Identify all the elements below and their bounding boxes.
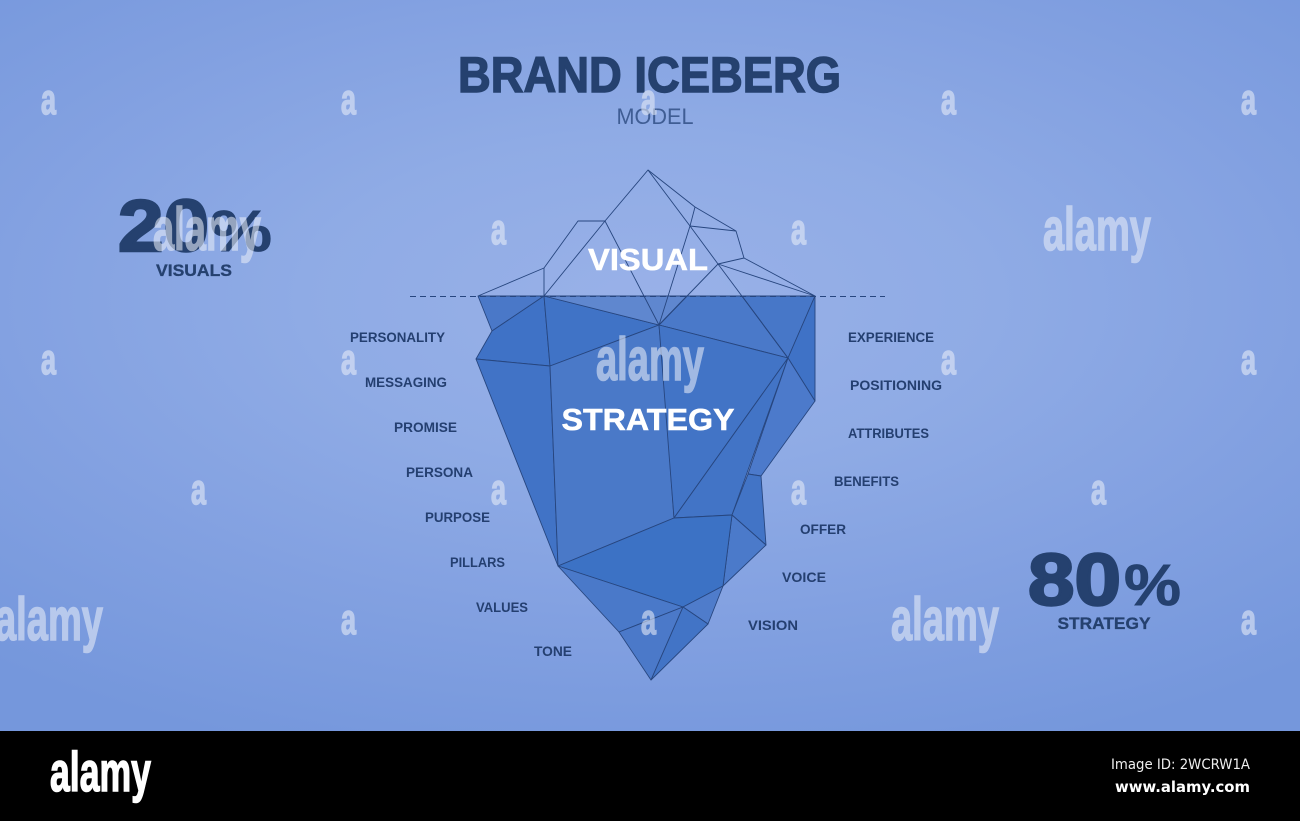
label: strategy: STRATEGY [562,402,735,437]
right labels: ATTRIBUTES [848,426,929,441]
watermarks: alamy [0,586,103,653]
watermarks: a [791,466,807,514]
watermarks: a [341,76,357,124]
watermarks: a [641,76,657,124]
watermarks: a [491,466,507,514]
title: BRAND ICEBERG [458,47,841,103]
left labels: MESSAGING [365,375,447,390]
right labels: EXPERIENCE [848,330,934,345]
left labels: PURPOSE [425,510,490,525]
watermarks: a [1241,596,1257,644]
iceberg [476,170,815,680]
watermarks: a [191,466,207,514]
left labels: PERSONALITY [350,330,445,345]
watermarks: a [641,596,657,644]
left labels: PILLARS [450,555,505,570]
watermarks: a [341,336,357,384]
stat: 20% visuals: VISUALS [156,262,232,280]
water line [410,296,885,298]
left labels: VALUES [476,600,528,615]
watermarks: a [941,76,957,124]
stat: 80% strategy: STRATEGY [1058,615,1150,633]
watermarks: alamy [596,326,704,393]
watermarks: alamy [153,196,261,263]
subtitle: MODEL [616,104,694,129]
right labels [748,330,942,633]
left labels [350,330,572,659]
watermarks: alamy [891,586,999,653]
watermarks: a [1091,466,1107,514]
left labels: PROMISE [394,420,457,435]
watermarks: a [491,206,507,254]
watermarks: alamy [1043,196,1151,263]
left labels: TONE [534,644,572,659]
right labels: OFFER [800,522,846,537]
stat: 20% visuals [118,186,272,280]
stat: 20% visuals: 20 [118,186,209,267]
footer bar: Image ID: 2WCRW1A [1111,757,1250,773]
above water outline [478,170,815,358]
stat: 80% strategy: 80 [1028,540,1121,621]
footer bar [0,731,1300,821]
right labels: VOICE [782,570,826,585]
underwater facets [476,296,815,680]
label: visual: VISUAL [588,242,708,277]
stat: 20% visuals: % [210,199,272,264]
right labels: POSITIONING [850,378,942,393]
left labels: PERSONA [406,465,473,480]
watermarks: a [41,336,57,384]
watermarks: a [341,596,357,644]
watermarks: a [1241,76,1257,124]
stat: 80% strategy: % [1124,553,1181,618]
watermarks: a [1241,336,1257,384]
footer bar: www.alamy.com [1115,778,1250,796]
right labels: BENEFITS [834,474,899,489]
right labels: VISION [748,618,798,633]
watermarks [0,76,1257,653]
watermarks: a [791,206,807,254]
footer bar: alamy [50,740,151,803]
watermarks: a [941,336,957,384]
watermarks: a [41,76,57,124]
stat: 80% strategy [1028,540,1181,633]
